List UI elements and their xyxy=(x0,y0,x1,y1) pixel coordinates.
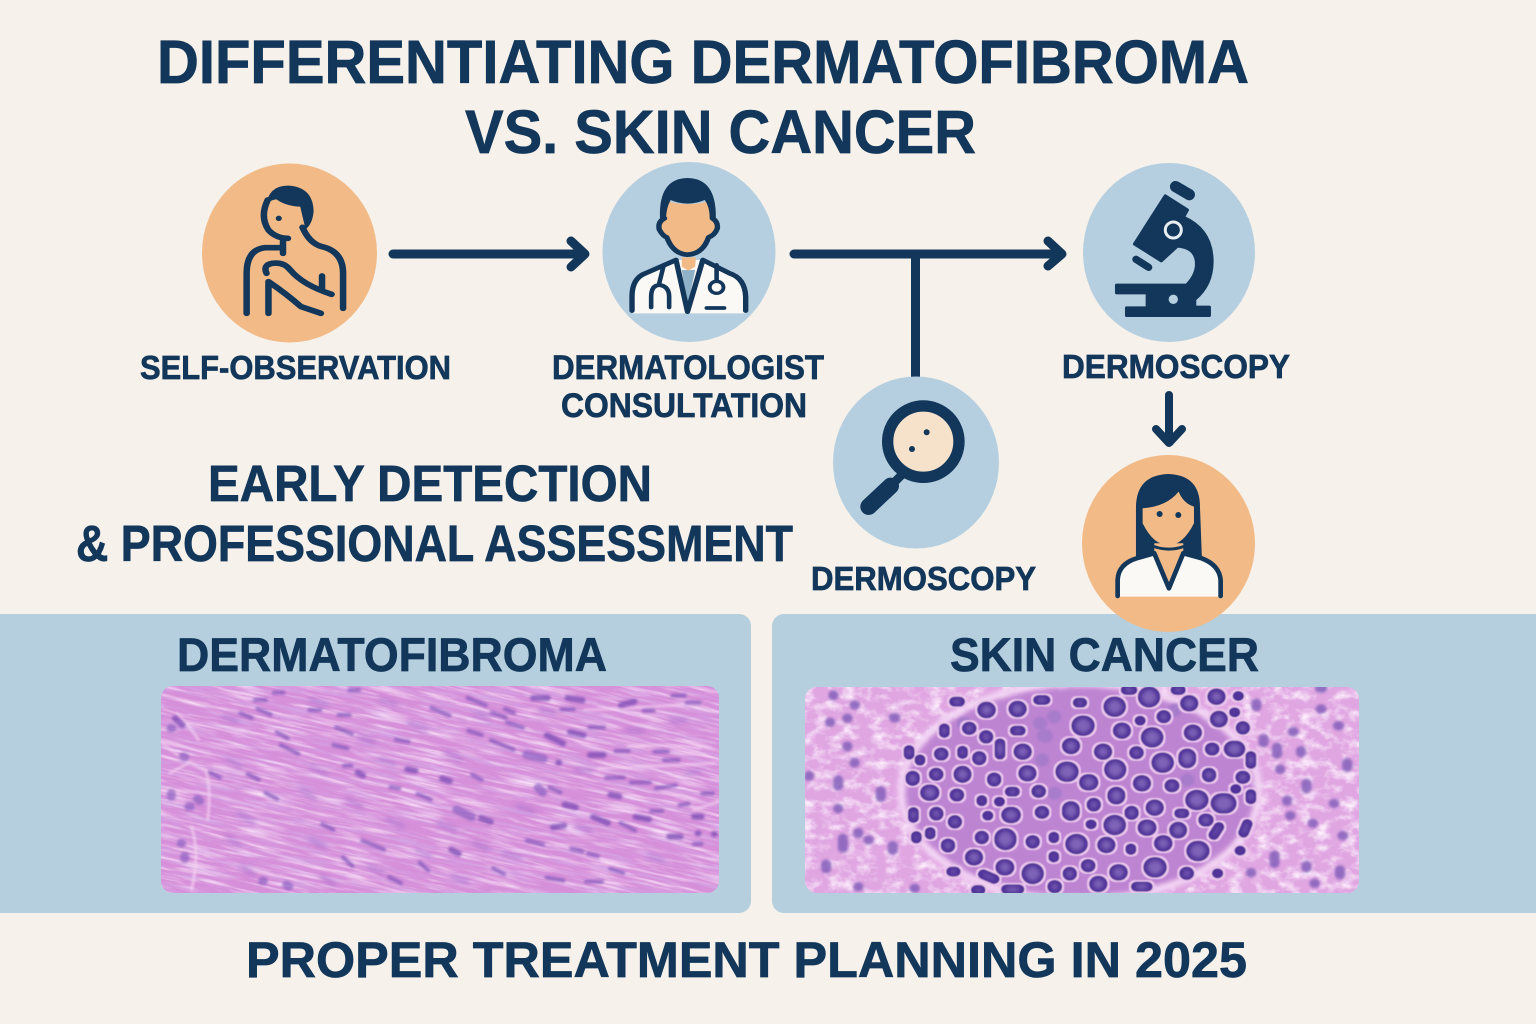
panel: dermatofibroma xyxy=(0,614,751,913)
label: dermoscopy (right): DERMOSCOPY xyxy=(1062,348,1290,385)
subheading: early detection xyxy=(76,455,793,572)
histology image: spindle cells xyxy=(161,686,719,893)
subheading: early detection: EARLY DETECTION xyxy=(208,455,652,512)
icon: magnifying glass xyxy=(833,376,999,548)
icon: microscope xyxy=(1083,163,1255,342)
subheading: early detection: & PROFESSIONAL ASSESSMENT xyxy=(76,515,793,572)
title: DIFFERENTIATING DERMATOFIBROMA xyxy=(157,28,1249,96)
arrow: dermoscopy down to specialist xyxy=(1156,395,1182,443)
footer heading: PROPER TREATMENT PLANNING IN 2025 xyxy=(246,932,1247,988)
label: self-observation: SELF-OBSERVATION xyxy=(140,349,451,386)
label: dermatologist consultation: CONSULTATION xyxy=(561,387,807,425)
icon: dermatologist xyxy=(602,162,776,342)
heading: dermatofibroma: DERMATOFIBROMA xyxy=(177,628,607,681)
histology image: tumor nest xyxy=(805,683,1359,900)
icon: female specialist xyxy=(1082,455,1255,632)
title xyxy=(157,28,1249,166)
title: VS. SKIN CANCER xyxy=(465,98,976,166)
label: dermatologist consultation xyxy=(552,349,824,425)
label: dermoscopy (lower): DERMOSCOPY xyxy=(811,560,1036,597)
panel: skin cancer xyxy=(772,614,1536,913)
arrow: dermatologist to dermoscopy with branch xyxy=(794,241,1062,378)
label: dermatologist consultation: DERMATOLOGIST xyxy=(552,349,824,387)
heading: skin cancer: SKIN CANCER xyxy=(950,628,1259,681)
icon: self-observation xyxy=(202,164,377,342)
arrow: self-observation to dermatologist xyxy=(393,241,585,267)
